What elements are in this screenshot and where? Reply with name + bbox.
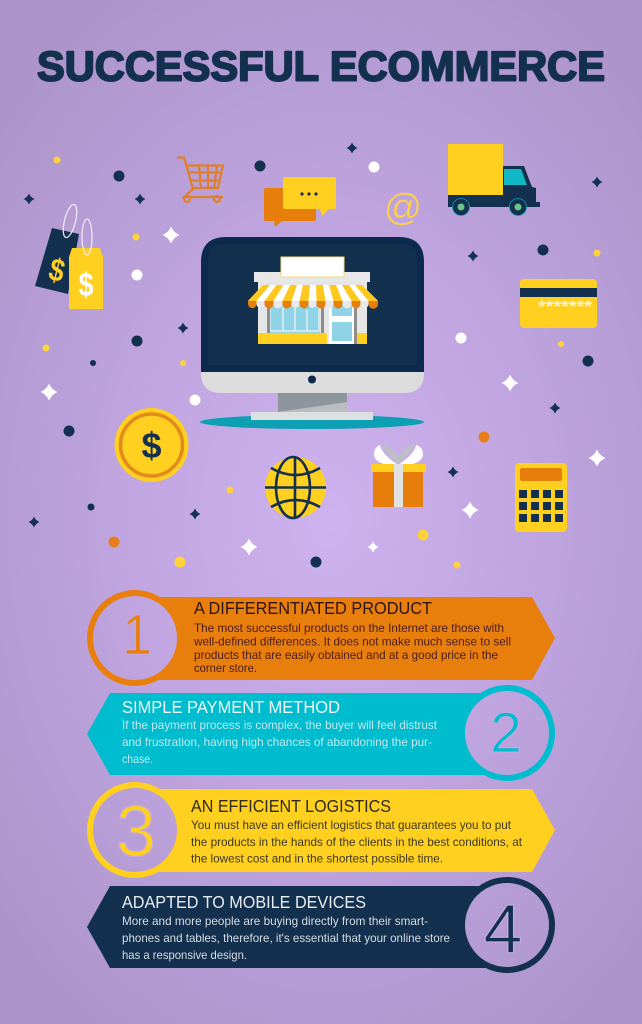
body text 1: products that are easily obtained and at a good price in the [194, 648, 498, 662]
teal arrow banner [87, 693, 507, 775]
icon: dollar coin: $ [141, 425, 162, 466]
body text 1: The most successful products on the Internet are those with [194, 621, 504, 635]
icon: shopping cart [177, 158, 223, 202]
monitor stand [251, 393, 373, 420]
icon: price tags [35, 203, 103, 309]
number circle 1 [90, 593, 180, 683]
icon: price tags: $ [78, 266, 94, 303]
body text 2 [122, 718, 438, 766]
number circle 4 [462, 880, 552, 970]
icon: price tags: $ [45, 251, 69, 289]
navy arrow banner [87, 886, 507, 968]
body text 1 [193, 621, 511, 675]
icon: delivery truck [448, 144, 540, 216]
panel: 1 differentiated product: 1 [122, 603, 152, 667]
body text 2: If the payment process is complex, the buyer will feel distrust [122, 718, 438, 732]
yellow arrow banner [135, 789, 555, 872]
panel: 3 efficient logistics: 3 [116, 792, 156, 872]
heading 3: AN EFFICIENT LOGISTICS [191, 796, 391, 816]
storefront [248, 257, 378, 344]
monitor with storefront [200, 237, 424, 429]
teal shadow ellipse [200, 415, 424, 429]
monitor screen [201, 237, 424, 372]
orange arrow banner [135, 597, 555, 680]
panel: 3 efficient logistics [90, 785, 555, 875]
decorative white sparkles [40, 226, 606, 556]
heading 1: A DIFFERENTIATED PRODUCT [194, 598, 432, 618]
awning [248, 285, 378, 310]
heading 2: SIMPLE PAYMENT METHOD [122, 697, 340, 717]
panel: 4 adapted to mobile devices: 4 [484, 890, 522, 968]
body text 3 [191, 818, 523, 866]
icon: credit card: ******* [538, 297, 592, 316]
panel: 1 differentiated product [90, 593, 555, 683]
body text 3: You must have an efficient logistics that guarantees you to put [191, 818, 512, 832]
icon: dollar coin [114, 408, 188, 482]
panel: 4 adapted to mobile devices [87, 880, 552, 970]
icon: at sign: @ [384, 187, 422, 229]
body text 1: corner store. [194, 661, 257, 675]
body text 3: the lowest cost and in the shortest possible time. [191, 852, 443, 866]
decorative navy stars [24, 142, 602, 528]
decorative dots [42, 156, 600, 568]
body text 4 [122, 914, 450, 962]
monitor camera dot [308, 376, 316, 384]
body text 4: has a responsive design. [122, 948, 247, 962]
number circle 2 [462, 688, 552, 778]
body text 4: More and more people are buying directly from their smart- [122, 914, 428, 928]
body text 1: well-defined differences. It does not make much sense to sell [193, 634, 511, 648]
panel: 2 simple payment method [87, 688, 552, 778]
body text 2: and frustration, having high chances of abandoning the pur- [122, 735, 432, 749]
number circle 3 [90, 785, 180, 875]
monitor bezel [201, 372, 424, 393]
panel: 2 simple payment method: 2 [490, 701, 522, 765]
title: SUCCESSFUL ECOMMERCE [37, 42, 605, 90]
icon: chat bubbles [264, 177, 336, 227]
icon: credit card [520, 279, 597, 328]
heading 4: ADAPTED TO MOBILE DEVICES [122, 892, 366, 912]
icon: gift box [371, 445, 426, 507]
body text 2: chase. [122, 752, 153, 766]
icon: globe [265, 457, 326, 518]
body text 3: the products in the hands of the clients in the best conditions, at [191, 835, 523, 849]
icon: calculator [515, 463, 567, 532]
body text 4: phones and tables, therefore, it's essential that your online store [122, 931, 450, 945]
